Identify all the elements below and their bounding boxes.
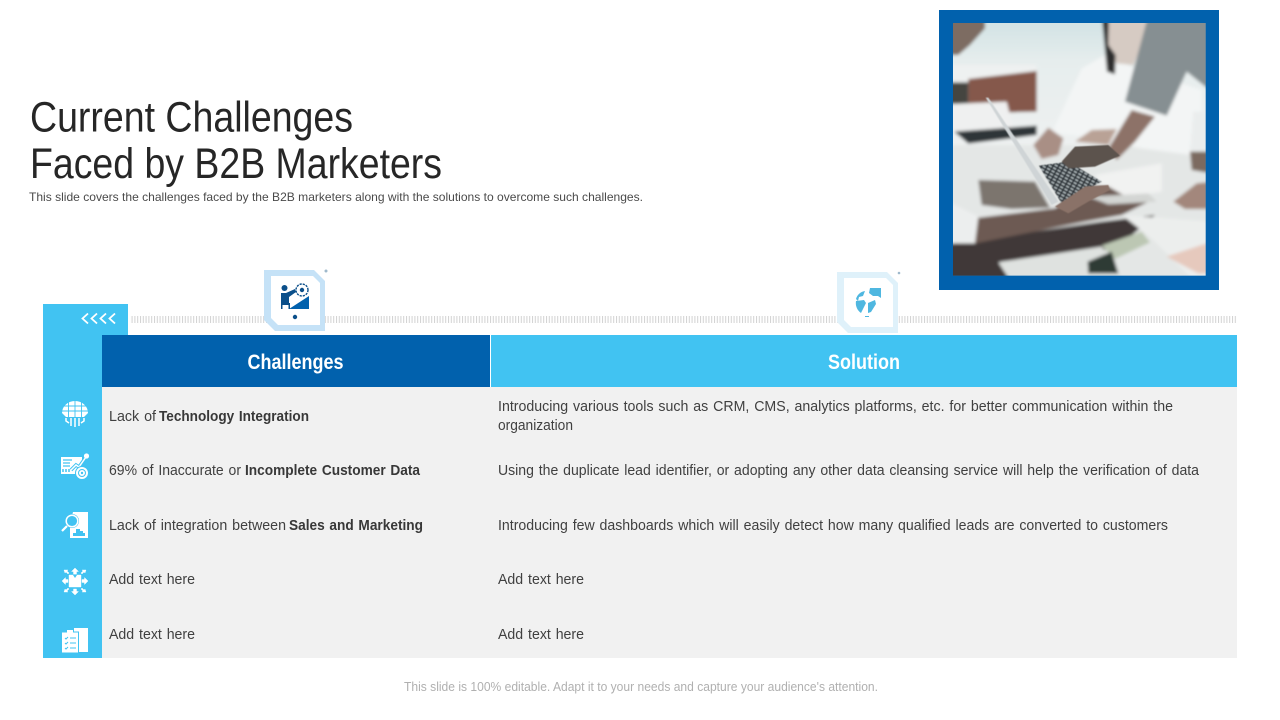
row 1 solution <box>498 398 1173 434</box>
row 1 challenge: Technology Integration <box>159 408 309 425</box>
row 2 challenge: 69% of Inaccurate or <box>109 462 241 479</box>
row 4 challenge: Add text here <box>109 571 195 588</box>
icon: box with arrows <box>62 568 88 595</box>
icon badge: challenges <box>264 270 328 331</box>
icon: back chevrons <box>82 314 115 324</box>
row 2 solution: Using the duplicate lead identifier, or adopting any other data cleansing service will help the verification of data <box>498 462 1200 479</box>
row 1 challenge: Lack of <box>109 408 157 425</box>
row 3 challenge: Sales and Marketing <box>289 517 423 534</box>
row 2 challenge <box>109 462 421 479</box>
row 4 solution: Add text here <box>498 571 584 588</box>
row 1 solution: organization <box>498 417 573 434</box>
row 1 solution: Introducing various tools such as CRM, CMS, analytics platforms, etc. for better communication within the <box>498 398 1173 415</box>
subtitle: This slide covers the challenges faced by the B2B marketers along with the solutions to overcome such challenges. <box>29 190 643 204</box>
header: solution <box>491 335 1237 387</box>
header: solution: Solution <box>828 351 900 374</box>
footer note: This slide is 100% editable. Adapt it to your needs and capture your audience's attention. <box>404 679 878 694</box>
icon: clipboard checklist <box>62 628 88 653</box>
row 3 challenge <box>109 517 423 534</box>
title: Current Challenges <box>30 94 353 142</box>
title: Faced by B2B Marketers <box>30 140 442 188</box>
row 3 challenge: Lack of integration between <box>109 517 286 534</box>
photo: team working at laptop in blue frame <box>939 10 1219 290</box>
table body background <box>102 387 1237 658</box>
icon: globe circuit <box>62 400 88 427</box>
row 1 challenge <box>109 408 309 425</box>
row 5 solution: Add text here <box>498 626 584 643</box>
icon: search report <box>62 512 88 538</box>
icon: data analytics <box>61 453 89 480</box>
header: challenges: Challenges <box>248 351 344 374</box>
title <box>30 94 442 188</box>
row 2 challenge: Incomplete Customer Data <box>245 462 421 479</box>
left blue sidebar <box>43 304 128 658</box>
header: challenges <box>102 335 490 387</box>
icon badge: solution <box>837 272 900 333</box>
row 5 challenge: Add text here <box>109 626 195 643</box>
row 3 solution: Introducing few dashboards which will easily detect how many qualified leads are converted to customers <box>498 517 1168 534</box>
dotted timeline <box>130 316 1237 323</box>
